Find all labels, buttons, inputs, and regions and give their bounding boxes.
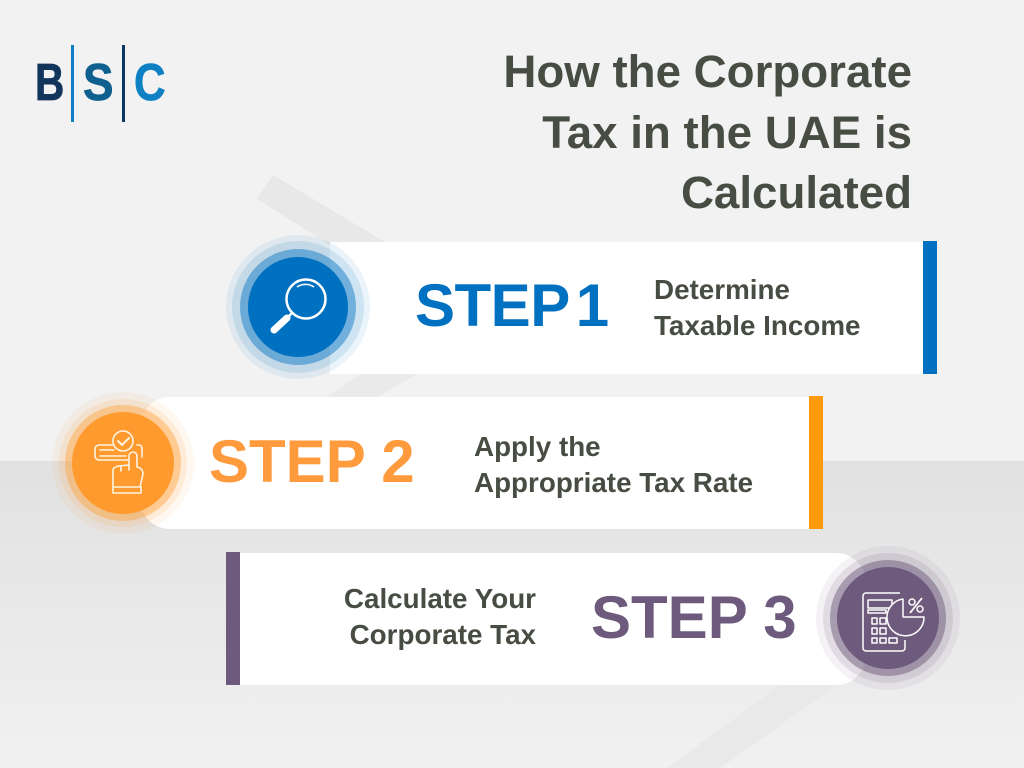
step 3 description: Corporate Tax xyxy=(350,619,536,650)
logo xyxy=(35,45,166,122)
step 3 description xyxy=(344,583,536,650)
step 2 description: Apply the xyxy=(474,431,601,462)
step 3 description: Calculate Your xyxy=(344,583,536,614)
icon: hand with checklist xyxy=(52,392,194,534)
title xyxy=(503,46,912,218)
icon: magnifier xyxy=(226,235,370,379)
step 2 label: STEP 2 xyxy=(209,428,415,495)
logo: C xyxy=(134,54,166,112)
step 2 description: Appropriate Tax Rate xyxy=(474,467,753,498)
logo: S xyxy=(83,54,114,112)
title: Tax in the UAE is xyxy=(542,107,912,158)
panel: step 1 xyxy=(226,235,937,379)
logo: B xyxy=(35,54,64,112)
step 1 description: Determine xyxy=(654,274,790,305)
panel: step 2 xyxy=(52,392,823,534)
title: Calculated xyxy=(681,167,912,218)
step 3 label: STEP 3 xyxy=(591,584,797,651)
step 1 description: Taxable Income xyxy=(654,310,860,341)
title: How the Corporate xyxy=(503,46,912,97)
panel: step 3 xyxy=(226,546,960,690)
step 1 label: STEP 1 xyxy=(415,272,609,339)
step 2 description xyxy=(474,431,753,498)
step 1 description xyxy=(654,274,860,341)
icon: calculator with pie chart xyxy=(816,546,960,690)
